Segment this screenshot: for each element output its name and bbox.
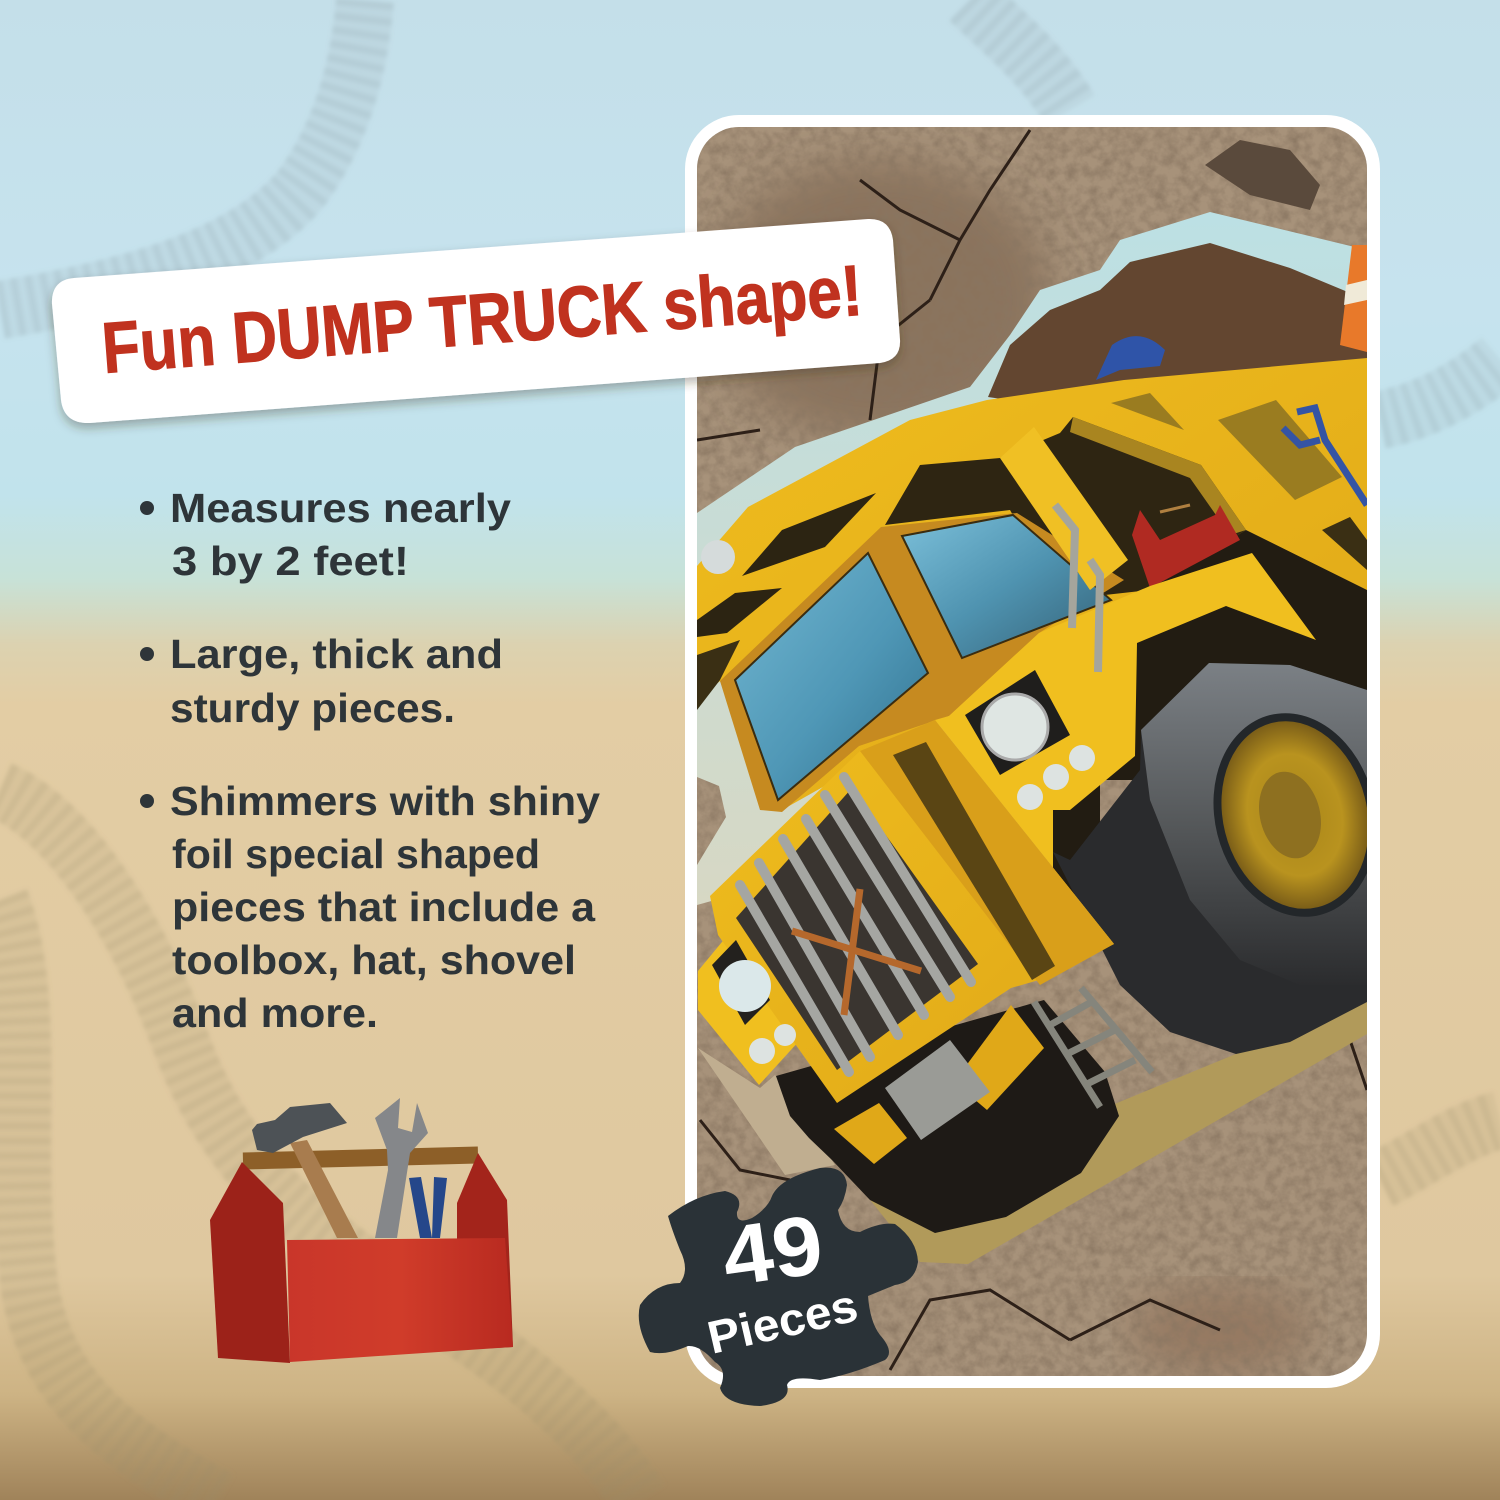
bullet: size: 3 by 2 feet!	[172, 538, 409, 584]
cab windows	[735, 515, 1111, 800]
bullet: size: Measures nearly	[170, 485, 511, 531]
title text: Fun DUMP TRUCK shape!	[99, 251, 865, 389]
badge number: 49	[716, 1197, 829, 1304]
icon: screwdrivers	[409, 1177, 447, 1238]
gold puzzle base	[846, 1000, 1367, 1264]
left headlamp block	[698, 942, 796, 1085]
headlights	[701, 540, 1095, 1064]
tan puzzle base left of front tire	[698, 1048, 835, 1175]
icon: wrench	[375, 1098, 428, 1238]
photo card frame	[685, 115, 1380, 1388]
large rear tire	[1053, 663, 1398, 1054]
exhaust pipes	[1055, 505, 1100, 672]
bullet: pieces: sturdy pieces.	[170, 685, 455, 731]
icon: toolbox back handle	[243, 1155, 478, 1161]
puzzle photo panel	[697, 127, 1398, 1376]
side vents	[893, 742, 1055, 980]
radiator side column	[860, 720, 1114, 985]
bullet: pieces: Large, thick and	[170, 631, 503, 677]
toolbox on truck	[1132, 505, 1240, 588]
icon: red toolbox with tools	[210, 1098, 513, 1363]
icon: toolbox left gable	[210, 1162, 290, 1363]
gold hub	[1214, 713, 1367, 917]
title banner	[52, 219, 900, 423]
bullet: foil	[140, 778, 600, 1036]
yellow door flap	[1000, 427, 1128, 590]
dark shadow under bed	[1053, 530, 1367, 900]
grille	[736, 777, 978, 1072]
badge label: Pieces	[703, 1279, 862, 1364]
bullet list	[140, 485, 600, 1036]
dump bed and cab body	[697, 358, 1367, 810]
badge: 49 pieces puzzle piece	[639, 1168, 918, 1406]
icon: toolbox front	[287, 1238, 513, 1362]
icon: toolbox right gable	[457, 1153, 513, 1350]
front chassis and radiator	[710, 720, 1114, 1103]
bullet: foil: foil special shaped	[172, 831, 540, 877]
bullet: foil: toolbox, hat, shovel	[172, 937, 576, 983]
yellow fender arm	[935, 553, 1316, 944]
bullet: foil: and more.	[172, 990, 378, 1036]
winch	[885, 1040, 990, 1140]
bullet: foil: Shimmers with shiny	[170, 778, 600, 824]
bullet: size	[140, 485, 511, 584]
cracked dirt ground	[697, 127, 1367, 1376]
bullet: pieces	[140, 631, 503, 731]
icon: hammer	[252, 1103, 358, 1238]
dirt load	[988, 243, 1367, 412]
roof windows	[697, 493, 876, 710]
traffic cone	[1340, 245, 1367, 352]
dark hood recess	[885, 417, 1246, 600]
cab frame	[720, 513, 1124, 812]
front bumper	[834, 1005, 1044, 1164]
tire sidewall	[1141, 663, 1367, 985]
lower front tire	[776, 1000, 1119, 1233]
ladder	[1034, 988, 1152, 1107]
hard hat	[1096, 336, 1165, 380]
shovel	[1283, 408, 1367, 505]
bullet: foil: pieces that include a	[172, 884, 596, 930]
light blue die-cut puzzle edge	[697, 212, 1367, 905]
bed recess dark panels	[1111, 393, 1367, 570]
